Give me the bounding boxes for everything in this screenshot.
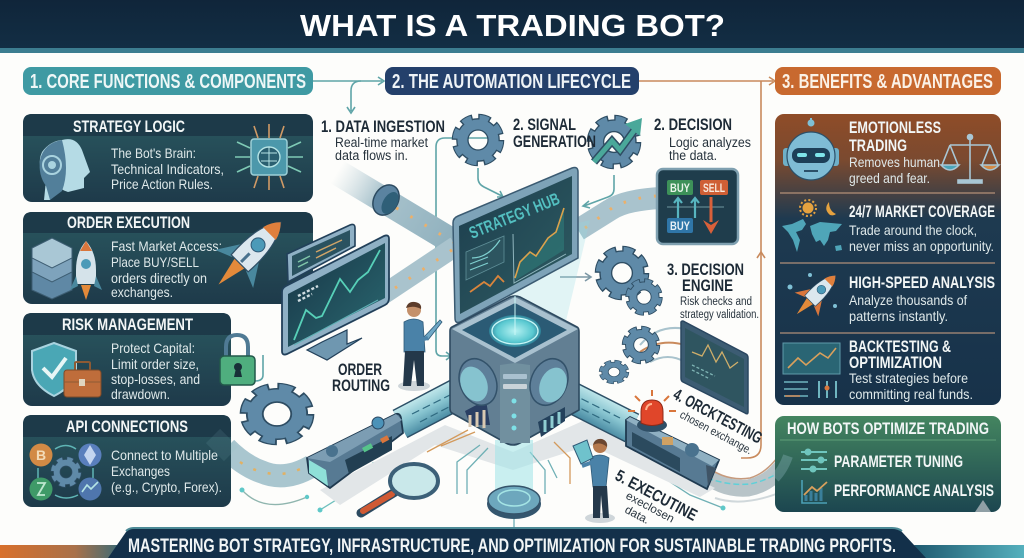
front monitor with rising chart: [282, 235, 389, 360]
benefit: market coverage: Trade around the clock,: [849, 222, 977, 238]
icon: flat small gear: [601, 362, 627, 382]
step: signal generation: GENERATION: [513, 133, 596, 151]
backtesting monitor: [681, 321, 748, 414]
panel: order execution: exchanges.: [111, 284, 173, 300]
step: decision engine: Risk checks and: [680, 296, 752, 308]
icon: server stack: [32, 238, 72, 299]
benefit: high speed analysis: patterns instantly.: [849, 308, 948, 324]
step: signal generation: 2. SIGNAL: [513, 116, 576, 134]
order routing label: [332, 361, 390, 395]
benefit: emotionless trading: EMOTIONLESS: [849, 119, 941, 137]
strategy hub screen: [453, 168, 578, 322]
icon: world map: [782, 219, 842, 252]
panel: risk management: Limit order size,: [111, 356, 199, 372]
icon: analysis rocket: [785, 264, 847, 326]
soft ground shadow: [320, 420, 715, 505]
panel: how bots optimize trading: [775, 416, 1001, 512]
left tube: [400, 382, 480, 424]
order routing label: ORDER: [338, 361, 382, 379]
panel: risk management: [23, 313, 255, 406]
benefit: emotionless trading: greed and fear.: [849, 170, 930, 186]
icon: green padlock: [220, 335, 255, 385]
benefit: emotionless trading: [849, 119, 941, 186]
icon: briefcase: [64, 362, 101, 397]
panel: order execution: Place BUY/SELL: [111, 254, 199, 270]
step: execution: 5. EXECUTINE: [612, 467, 700, 525]
icon: magnifying glass: [361, 464, 438, 513]
panel: how bots optimize trading: PARAMETER TUNING: [834, 453, 963, 471]
panel: risk management: RISK MANAGEMENT: [62, 316, 193, 334]
panel: api connections: Exchanges: [111, 463, 170, 479]
circuit terminal dots: [240, 488, 726, 512]
step: data ingestion: 1. DATA INGESTION: [321, 118, 445, 136]
icon: pipe coupler: [368, 180, 404, 220]
icon: backtest chart and sliders: [783, 343, 840, 398]
icon: sun and moon: [800, 200, 836, 216]
footer accent: teal strip: [914, 545, 1024, 558]
central hub: [450, 296, 579, 445]
title banner: WHAT IS A TRADING BOT?: [300, 8, 725, 43]
step: backtesting: 4. ORCKTESTING: [670, 386, 765, 448]
step: decision engine: strategy validation.: [680, 309, 759, 321]
icon: exchange coins and gear: [30, 444, 102, 500]
panel: risk management: stop-losses, and: [111, 371, 200, 387]
step: data ingestion: Real-time market: [335, 135, 428, 150]
icon: gear with rising arrow: [591, 118, 642, 165]
icon: performance chart: [802, 480, 827, 503]
step: data ingestion: [321, 118, 445, 163]
panel: api connections: Connect to Multiple: [111, 447, 218, 463]
panel: api connections: (e.g., Crypto, Forex).: [111, 479, 222, 495]
benefit: backtesting and optimization: BACKTESTING &: [849, 338, 951, 356]
benefit: backtesting and optimization: OPTIMIZATION: [849, 354, 942, 372]
benefit: backtesting and optimization: committing real funds.: [849, 386, 973, 402]
icon: buy sell decision board: [657, 169, 738, 244]
benefit: high speed analysis: [849, 274, 995, 324]
step: execution: execlosen: [624, 490, 676, 526]
panel: order execution: Fast Market Access:: [111, 238, 222, 254]
step: decision engine: 3. DECISION: [667, 261, 744, 279]
step: execution: data.: [623, 504, 651, 527]
panel: api connections: API CONNECTIONS: [66, 418, 188, 436]
benefit: market coverage: [849, 203, 995, 254]
benefit: market coverage: never miss an opportunity.: [849, 238, 994, 254]
hologram beam: [462, 220, 590, 325]
step: backtesting: [670, 386, 765, 457]
left routing module: [307, 414, 403, 488]
icon: exchange coins and gear: B: [36, 447, 46, 463]
faint pipeline over api panel: [213, 436, 231, 454]
icon: shield with check: [32, 343, 76, 396]
panel: order execution: [23, 203, 313, 304]
benefit: backtesting and optimization: [849, 338, 973, 402]
base disc: [487, 486, 541, 519]
footer accent: orange strip: [0, 545, 125, 558]
title banner: [0, 0, 1024, 53]
step: signal generation: [513, 116, 596, 151]
step: decision: 2. DECISION: [654, 116, 732, 134]
icon: brain chip: [235, 124, 303, 190]
benefit: backtesting and optimization: Test strategies before: [849, 370, 968, 386]
panel: order execution: orders directly on: [111, 270, 207, 286]
step: decision engine: [667, 261, 759, 321]
connector lines between section headers: [250, 77, 775, 458]
back monitor: [287, 224, 355, 282]
person with tablet: [573, 439, 615, 523]
header: automation lifecycle: 2. THE AUTOMATION LIFECYCLE: [392, 71, 631, 93]
panel: strategy logic: [23, 114, 313, 202]
icon: buy sell decision board: BUY: [670, 183, 690, 195]
right tube: [547, 385, 632, 428]
panel: risk management: Protect Capital:: [111, 340, 195, 356]
benefit: emotionless trading: TRADING: [849, 137, 907, 155]
data pipeline streams: [226, 172, 786, 510]
circuit traces under hub: [427, 430, 570, 528]
icon: small rocket: [70, 241, 102, 300]
icon: gear signal: [456, 118, 500, 162]
step: decision: the data.: [669, 148, 717, 163]
icon: balance scale: [941, 134, 999, 183]
benefit: emotionless trading: Removes human: [849, 154, 940, 170]
step: decision: [654, 116, 751, 163]
icon: red alarm beacon: [628, 390, 676, 432]
panel: api connections: [23, 415, 231, 507]
icon: buy sell decision board: BUY: [670, 221, 690, 233]
footer banner: [108, 528, 926, 558]
step: data ingestion: data flows in.: [335, 148, 408, 163]
panel: order execution: ORDER EXECUTION: [67, 214, 190, 232]
step: decision: Logic analyzes: [669, 135, 751, 150]
beam to base disc: [495, 440, 533, 495]
panel: strategy logic: Price Action Rules.: [111, 176, 213, 192]
header: automation lifecycle: [385, 67, 639, 95]
step: decision engine: ENGINE: [682, 277, 733, 295]
panel: benefits and advantages: [775, 114, 1001, 405]
stream fading over benefits panel: [775, 456, 788, 478]
icon: big rocket: [199, 203, 300, 304]
person with laptop: [398, 302, 442, 391]
icon: parameter sliders: [801, 450, 827, 472]
panel: strategy logic: STRATEGY LOGIC: [73, 118, 185, 136]
icon: twin gears decision engine: [599, 250, 660, 313]
strategy hub screen: STRATEGY HUB: [466, 189, 563, 243]
right routing module: [626, 417, 719, 489]
benefit: high speed analysis: Analyze thousands of: [849, 292, 967, 308]
panel: risk management: drawdown.: [111, 386, 170, 402]
header: core functions: [23, 67, 313, 95]
icon: large flat gear: [245, 387, 309, 441]
panel: strategy logic: Technical Indicators,: [111, 161, 224, 177]
step: backtesting: chosen exchange.: [678, 409, 754, 457]
header: core functions: 1. CORE FUNCTIONS & COMPONENTS: [30, 71, 306, 93]
icon: buy sell decision board: SELL: [703, 183, 725, 195]
order routing label: ROUTING: [332, 377, 390, 395]
icon: small gear: [625, 329, 657, 361]
icon: robot face: [783, 118, 839, 180]
icon: robot head profile: [40, 139, 90, 200]
panel: strategy logic: The Bot's Brain:: [111, 145, 196, 161]
